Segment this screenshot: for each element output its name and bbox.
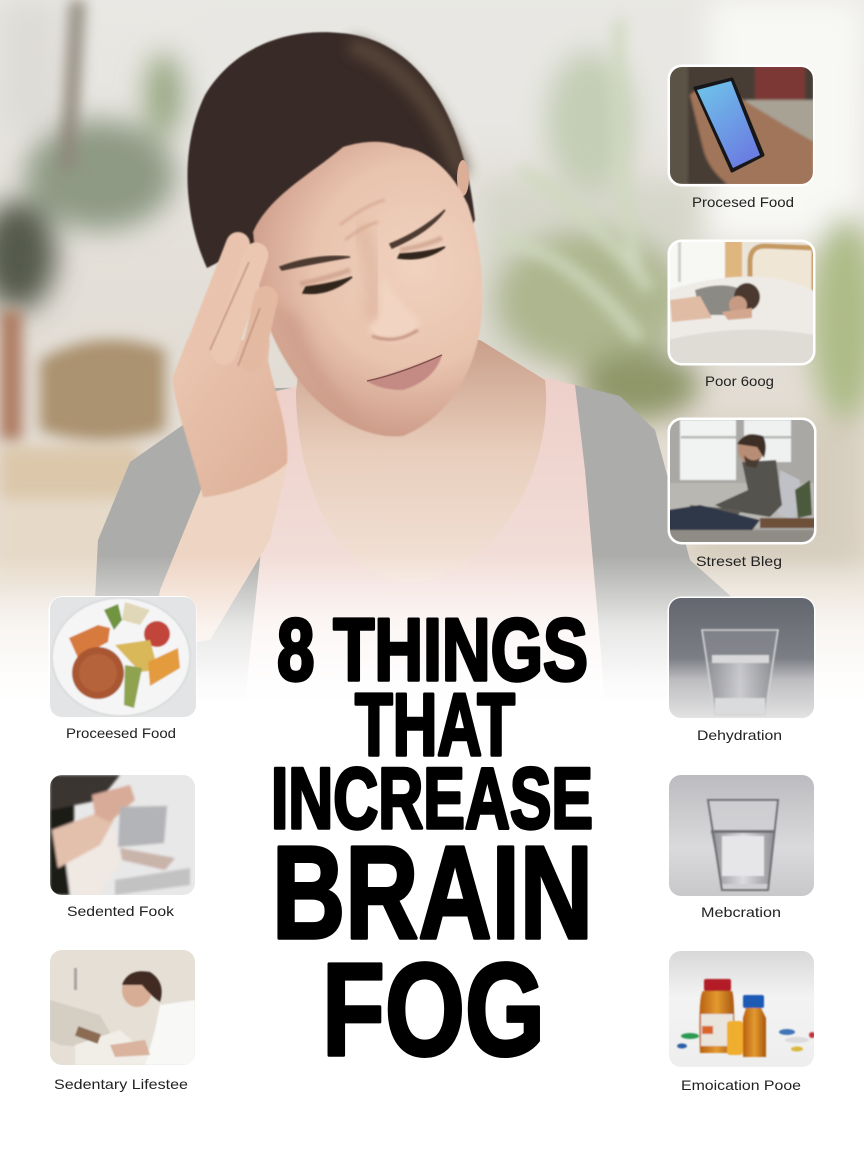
label: left column: Sedentary Lifestee <box>54 1076 188 1092</box>
title: FOG <box>322 936 545 1083</box>
label: right column: Procesed Food <box>692 194 794 210</box>
face <box>253 142 482 436</box>
thumbnail: full glass <box>669 775 814 896</box>
tank top <box>245 378 605 700</box>
thumbnail: bed <box>668 240 816 366</box>
title <box>271 600 593 1083</box>
cheek shading <box>272 300 365 425</box>
label: right column: Mebcration <box>701 904 781 920</box>
label: left column: Sedented Fook <box>67 903 175 919</box>
label: right column <box>681 194 801 1093</box>
phone <box>695 79 763 171</box>
ear <box>457 160 469 196</box>
eyes <box>303 277 352 293</box>
hand <box>173 244 287 497</box>
thumbnail: medication bottles <box>669 951 815 1067</box>
forehead creases <box>340 200 385 240</box>
label: right column: Poor 6oog <box>705 373 774 389</box>
cardigan <box>90 385 740 700</box>
thumbnail: glass of water <box>668 596 816 718</box>
label: left column: Proceesed Food <box>66 725 176 741</box>
nose <box>370 275 419 340</box>
hair highlight on the right <box>350 45 462 175</box>
title: INCREASE <box>271 751 593 847</box>
label: right column: Streset Bleg <box>696 553 782 569</box>
mouth <box>367 355 442 390</box>
eyelid shadows <box>300 238 442 284</box>
neck and chest <box>296 340 546 582</box>
title: BRAIN <box>272 819 593 966</box>
thumbnail: woman with phone <box>50 950 195 1065</box>
forearm <box>150 462 288 650</box>
label: left column <box>54 725 188 1092</box>
blurred room background <box>0 0 864 700</box>
woman holding her temple <box>90 32 740 700</box>
label: right column: Emoication Pooe <box>681 1077 801 1093</box>
title: 8 THINGS <box>277 600 588 699</box>
thumbnail: man sitting by window <box>668 418 816 544</box>
brows <box>280 256 350 270</box>
white fade at the bottom <box>0 555 864 715</box>
thumbnail: food plate <box>48 596 196 717</box>
thumbnail: blurred laptop user <box>50 775 195 895</box>
hair back <box>187 32 475 268</box>
thumbnail: phone <box>668 64 815 186</box>
label: right column: Dehydration <box>697 727 782 743</box>
title: THAT <box>355 675 515 774</box>
